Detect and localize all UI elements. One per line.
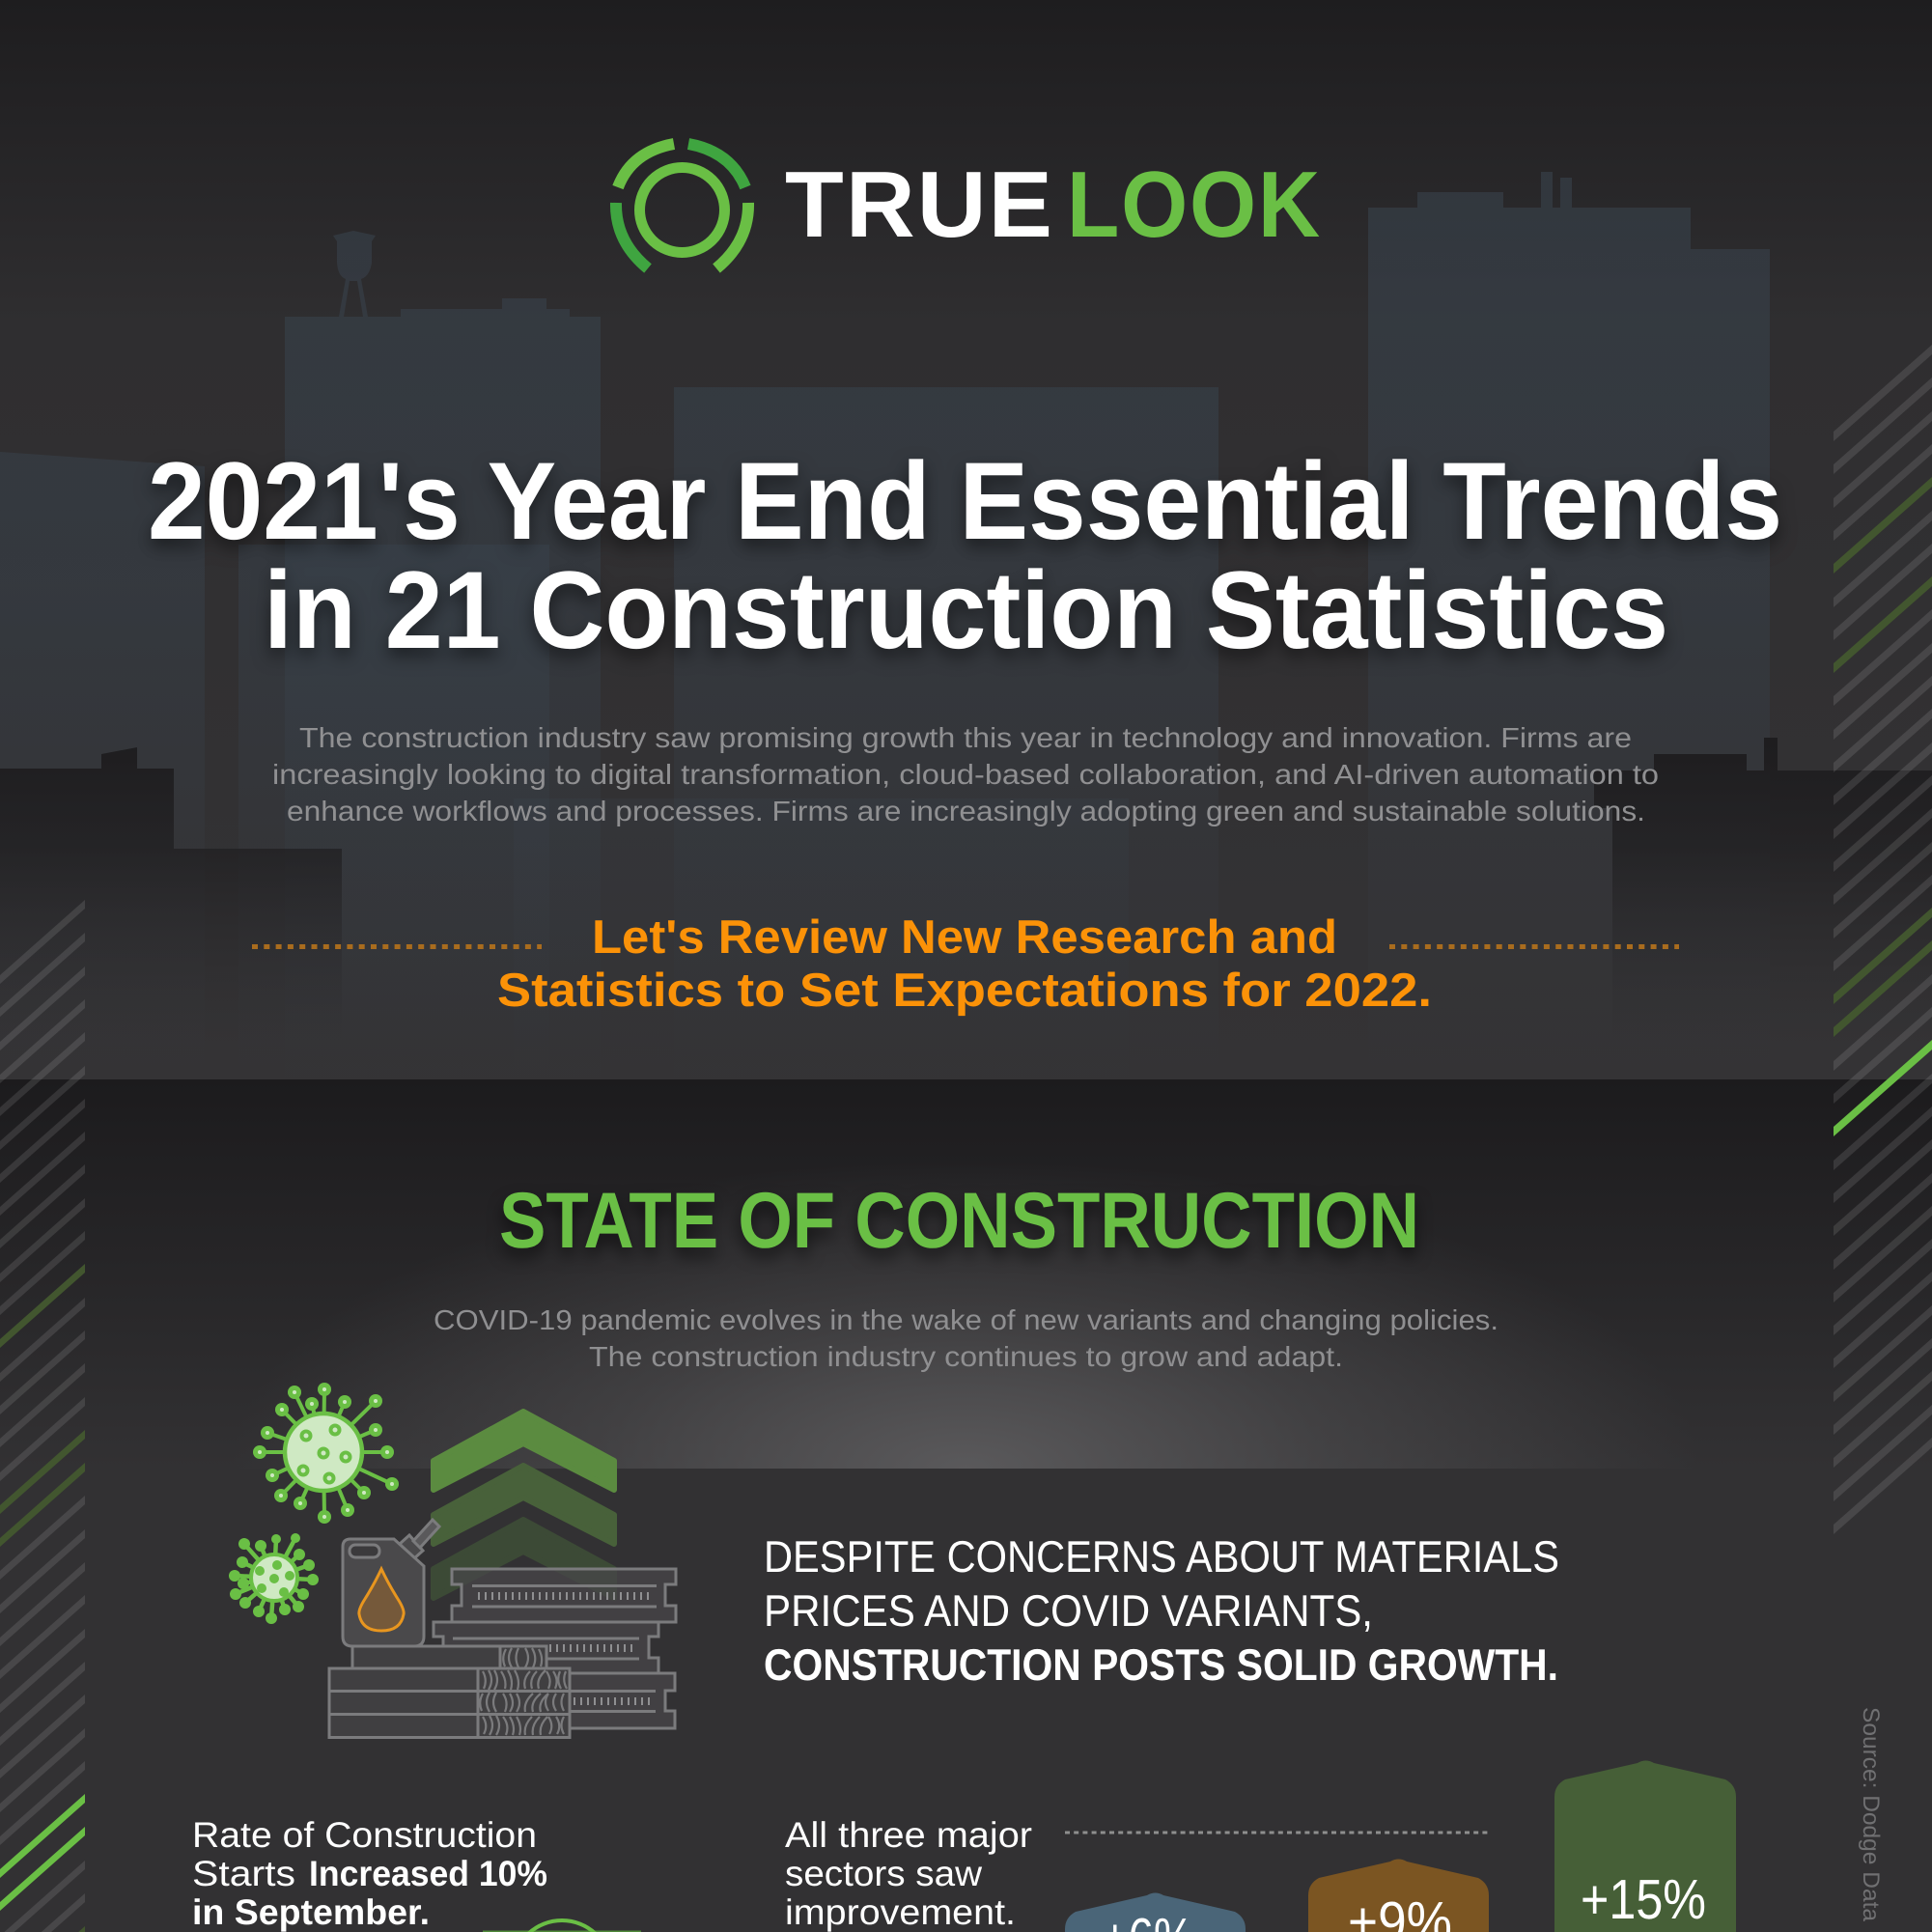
- text block: rate of construction starts: Rate of Construction: [192, 1815, 537, 1855]
- text block: construction posts solid growth: PRICES AND COVID VARIANTS,: [764, 1585, 1373, 1636]
- text block: rate of construction starts: [192, 1815, 547, 1932]
- text block: three major sectors: All three major: [785, 1815, 1032, 1855]
- intro paragraph: [272, 723, 1659, 827]
- icon: stacked boards: [434, 1569, 676, 1728]
- background: state of construction section: [0, 1079, 1932, 1469]
- bar: +9%: [1308, 1860, 1489, 1932]
- text block: rate of construction starts: Starts: [192, 1854, 295, 1893]
- title: 2021's Year End Essential Trends: [148, 440, 1782, 563]
- text block: three major sectors: [785, 1815, 1032, 1932]
- logo: TrueLook: [616, 144, 1322, 268]
- bar chart: sector growth: [1065, 1761, 1736, 1932]
- icon: small virus: [229, 1533, 319, 1624]
- text block: construction posts solid growth: CONSTRUCTION POSTS SOLID GROWTH.: [764, 1639, 1558, 1690]
- text block: three major sectors: improvement.: [785, 1892, 1016, 1932]
- illustration: materials and covid: [229, 1383, 676, 1738]
- background: header section: [0, 0, 1932, 1079]
- callout: review new research: [252, 911, 1679, 1017]
- text block: construction posts solid growth: [764, 1531, 1559, 1690]
- text block: rate of construction starts: Increased 10%: [309, 1854, 547, 1893]
- right diagonal stripes: [1834, 345, 1932, 1534]
- logo wordmark: [785, 152, 1322, 257]
- chart peek: rate gauge: [483, 1920, 641, 1932]
- text block: three major sectors: sectors saw: [785, 1854, 982, 1893]
- bar: +15%: [1554, 1761, 1736, 1932]
- title: [148, 440, 1782, 672]
- bar: +6%: [1065, 1892, 1246, 1932]
- heading: state of construction: STATE OF CONSTRUCTION: [499, 1177, 1419, 1265]
- logo wordmark: LOOK: [1067, 152, 1322, 257]
- bar: +15%: +15%: [1581, 1868, 1706, 1931]
- icon: large virus: [253, 1383, 399, 1524]
- icon: lumber beams: [329, 1646, 570, 1738]
- source note: Source: Dodge Data: [1858, 1707, 1884, 1922]
- city skyline silhouette: [0, 172, 1770, 1079]
- section description: COVID-19 pandemic evolves in the wake of new variants and changing policies.: [434, 1305, 1498, 1336]
- title: in 21 Construction Statistics: [264, 549, 1668, 672]
- intro paragraph: increasingly looking to digital transformation, cloud-based collaboration, and AI-driven automation to: [272, 760, 1659, 791]
- left diagonal stripes: [0, 900, 85, 1932]
- text block: construction posts solid growth: DESPITE CONCERNS ABOUT MATERIALS: [764, 1531, 1559, 1582]
- intro paragraph: enhance workflows and processes. Firms are increasingly adopting green and sustainable solutions.: [287, 797, 1645, 827]
- logo wordmark: TRUE: [785, 152, 1054, 257]
- dotted leader line: [1065, 1831, 1489, 1834]
- icon: oil can: [343, 1520, 439, 1646]
- text block: rate of construction starts: in September.: [192, 1892, 430, 1932]
- intro paragraph: The construction industry saw promising growth this year in technology and innovation. Firms are: [299, 723, 1632, 754]
- callout: review new research: Statistics to Set Expectations for 2022.: [497, 965, 1432, 1017]
- callout: review new research: Let's Review New Research and: [592, 911, 1337, 964]
- section description: [434, 1305, 1498, 1373]
- icon: upward chevrons: [434, 1412, 614, 1598]
- icon: logo ring: [616, 144, 748, 268]
- foreground dark buildings: [0, 738, 1932, 1079]
- section description: The construction industry continues to grow and adapt.: [589, 1342, 1343, 1373]
